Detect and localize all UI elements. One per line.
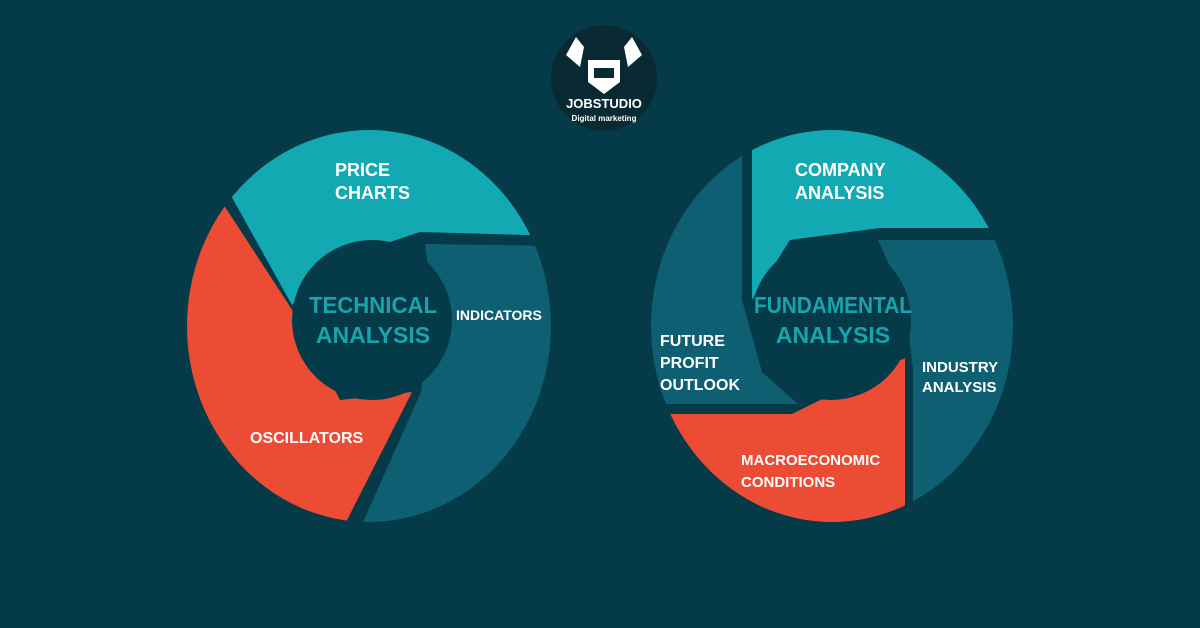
right cycle: fundamental analysis: ANALYSIS (776, 322, 890, 348)
segment: company analysis (752, 130, 989, 300)
right cycle: fundamental analysis: OUTLOOK (660, 377, 740, 394)
label: future profit outlook: FUTURE (660, 333, 725, 350)
label: company analysis: COMPANY (795, 160, 886, 180)
right cycle: fundamental analysis: ANALYSIS (922, 379, 996, 396)
label: industry analysis: INDUSTRY (922, 359, 998, 376)
logo (551, 25, 657, 131)
left cycle: technical analysis: ANALYSIS (316, 322, 430, 348)
segment: future profit outlook (651, 156, 798, 404)
right cycle: fundamental analysis: PROFIT (660, 355, 719, 372)
right cycle: fundamental analysis: CONDITIONS (741, 474, 835, 491)
label: macroeconomic: MACROECONOMIC (741, 452, 880, 469)
label: oscillators: OSCILLATORS (250, 430, 364, 447)
right cycle: fundamental analysis: ANALYSIS (795, 183, 884, 203)
left cycle: technical analysis: CHARTS (335, 183, 410, 203)
segment: macroeconomic conditions (670, 358, 905, 522)
segment: industry analysis (878, 240, 1013, 501)
segment: oscillators (187, 206, 412, 520)
segment: price charts (232, 130, 530, 305)
left cycle: technical analysis (187, 130, 551, 522)
label: indicators: INDICATORS (456, 307, 542, 323)
logo: Digital marketing (572, 114, 637, 123)
logo: JOBSTUDIO (566, 96, 642, 111)
right cycle: fundamental analysis (651, 130, 1013, 522)
center label: FUNDAMENTAL (754, 292, 912, 318)
segment: indicators (363, 244, 551, 522)
label: price charts: PRICE (335, 160, 390, 180)
center label: TECHNICAL (309, 292, 437, 318)
